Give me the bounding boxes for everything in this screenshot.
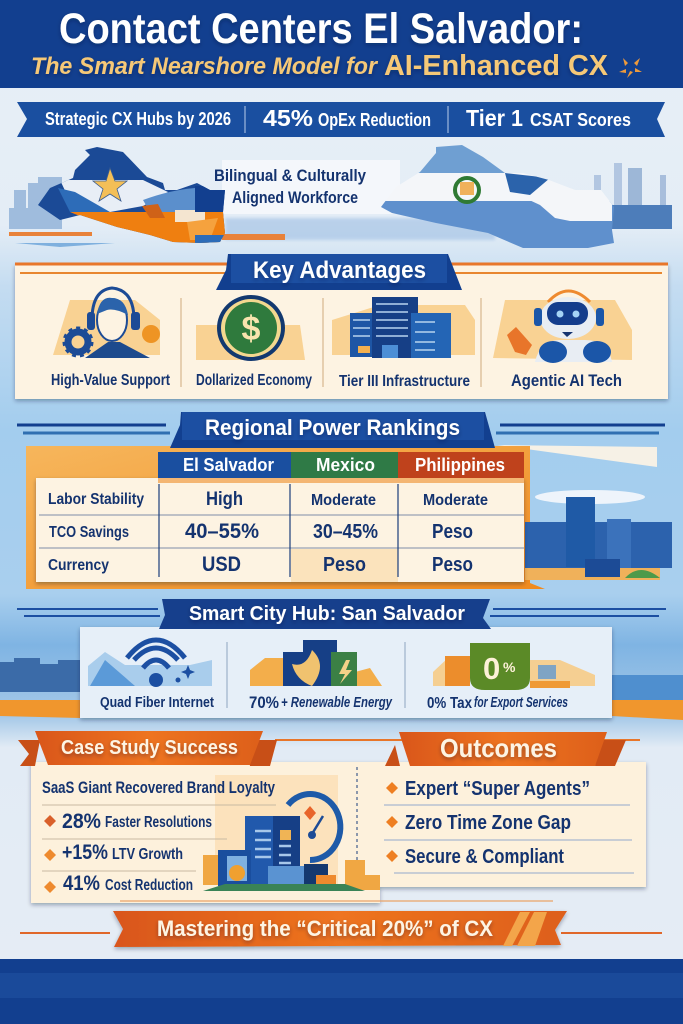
row: labor stability: Moderate <box>423 492 488 509</box>
label: Agentic AI Tech <box>511 372 622 390</box>
row: currency: Peso <box>323 554 366 576</box>
skyline right <box>594 163 672 229</box>
orange backdrop <box>26 446 545 589</box>
table header: Philippines <box>415 455 505 475</box>
ribbon: key advantages <box>216 254 462 290</box>
table header: Mexico <box>316 455 375 475</box>
label: for Export Services <box>474 695 568 711</box>
title: Contact Centers El Salvador: <box>59 5 583 53</box>
label: 0% Tax <box>427 695 472 712</box>
stat: strategic hubs: Strategic CX Hubs by 2026 <box>45 109 231 129</box>
row: tco savings <box>49 520 473 543</box>
metric: faster resolutions: 28% <box>62 810 101 833</box>
closing ribbon: Mastering the “Critical 20%” of CX <box>157 916 493 941</box>
metric: ltv growth <box>44 841 183 864</box>
label: + Renewable Energy <box>281 694 392 711</box>
label <box>427 695 568 712</box>
icon: building and clock <box>203 794 380 891</box>
callout text: Bilingual & Culturally <box>214 166 366 185</box>
icon: data center <box>332 297 475 358</box>
ribbon: case study success <box>18 731 277 766</box>
comparison table <box>36 452 524 582</box>
label: High-Value Support <box>51 372 170 389</box>
stat: opex: OpEx Reduction <box>318 110 431 130</box>
label: 70% <box>249 693 279 712</box>
ribbon <box>170 412 495 448</box>
stat: opex: 45% <box>263 105 313 131</box>
left map <box>38 147 225 243</box>
outcome: time zone: Zero Time Zone Gap <box>405 812 571 834</box>
icon: agent headset <box>53 288 160 358</box>
section: regional power rankings <box>17 412 672 589</box>
row: tco savings: Peso <box>432 521 473 543</box>
header banner <box>0 0 683 88</box>
outcome: secure: Secure & Compliant <box>405 846 564 868</box>
stats strip <box>17 102 665 137</box>
icon: zero tax badge <box>433 643 595 690</box>
map band <box>9 140 672 253</box>
row: labor stability: Labor Stability <box>48 491 144 508</box>
skyline <box>0 658 80 692</box>
icon: dollar coin: $ <box>242 310 261 348</box>
metric: cost reduction <box>44 872 193 895</box>
stat: opex <box>263 105 431 131</box>
table header: El Salvador <box>183 455 274 475</box>
row: tco savings: 40–55% <box>185 520 259 543</box>
panel: key advantages <box>15 254 668 399</box>
case headline: SaaS Giant Recovered Brand Loyalty <box>42 779 276 797</box>
label <box>249 693 392 712</box>
closing ribbon <box>20 901 662 947</box>
section: smart city hub <box>0 599 683 720</box>
icon: sparkle <box>619 58 642 78</box>
row: tco savings: TCO Savings <box>49 524 129 541</box>
callout text: Aligned Workforce <box>232 188 358 207</box>
metric: faster resolutions: Faster Resolutions <box>105 814 212 831</box>
panel: case study <box>18 731 646 903</box>
beam <box>497 445 657 467</box>
row: labor stability <box>48 489 488 510</box>
ribbon: Smart City Hub: San Salvador <box>189 603 465 625</box>
ribbon <box>159 599 491 629</box>
metric: cost reduction: 41% <box>63 872 100 895</box>
stat: csat: Tier 1 <box>466 105 523 131</box>
metric: ltv growth: +15% <box>62 841 108 864</box>
row: currency: USD <box>202 553 241 576</box>
row: tco savings: 30–45% <box>313 521 378 543</box>
orange streak <box>9 232 285 240</box>
side bands <box>0 700 683 720</box>
icon: zero tax badge: 0 <box>483 651 500 686</box>
callout background <box>222 160 400 214</box>
outcome: super agents: Expert “Super Agents” <box>405 778 590 800</box>
label: Tier III Infrastructure <box>339 373 470 390</box>
label: Quad Fiber Internet <box>100 695 214 711</box>
metric: ltv growth: LTV Growth <box>112 846 183 863</box>
subtitle <box>31 50 609 82</box>
metric: faster resolutions <box>44 810 212 833</box>
metric: cost reduction: Cost Reduction <box>105 877 193 894</box>
label: Dollarized Economy <box>196 372 312 389</box>
row: labor stability: High <box>206 489 243 510</box>
icon: coat of arms <box>455 178 479 202</box>
ribbon: Regional Power Rankings <box>205 415 460 440</box>
icon: wifi <box>88 640 212 687</box>
row: currency: Peso <box>432 554 473 576</box>
callout text <box>214 166 366 207</box>
ribbon: case study success: Case Study Success <box>61 737 238 759</box>
subtitle: AI-Enhanced CX <box>384 50 609 82</box>
table header <box>183 455 505 475</box>
ribbon: outcomes: Outcomes <box>440 733 557 763</box>
footer band <box>0 959 683 1024</box>
icon: renewable energy <box>250 640 382 686</box>
panel <box>80 627 612 718</box>
stat: csat <box>466 105 631 131</box>
subtitle: The Smart Nearshore Model for <box>31 53 379 80</box>
icon: dollar coin <box>196 295 305 361</box>
skyline left <box>9 177 62 229</box>
row: currency: Currency <box>48 557 109 574</box>
stat: csat: CSAT Scores <box>530 110 631 130</box>
icon: robot <box>493 291 632 363</box>
icon: zero tax badge: % <box>503 659 516 675</box>
ribbon: outcomes <box>385 732 626 766</box>
ribbon: key advantages: Key Advantages <box>253 257 426 284</box>
right map <box>381 145 614 248</box>
row: currency <box>48 553 473 576</box>
city <box>525 490 672 580</box>
icon: star <box>93 168 127 201</box>
water streak <box>225 218 495 240</box>
row: labor stability: Moderate <box>311 492 376 509</box>
blue streak <box>15 243 115 247</box>
